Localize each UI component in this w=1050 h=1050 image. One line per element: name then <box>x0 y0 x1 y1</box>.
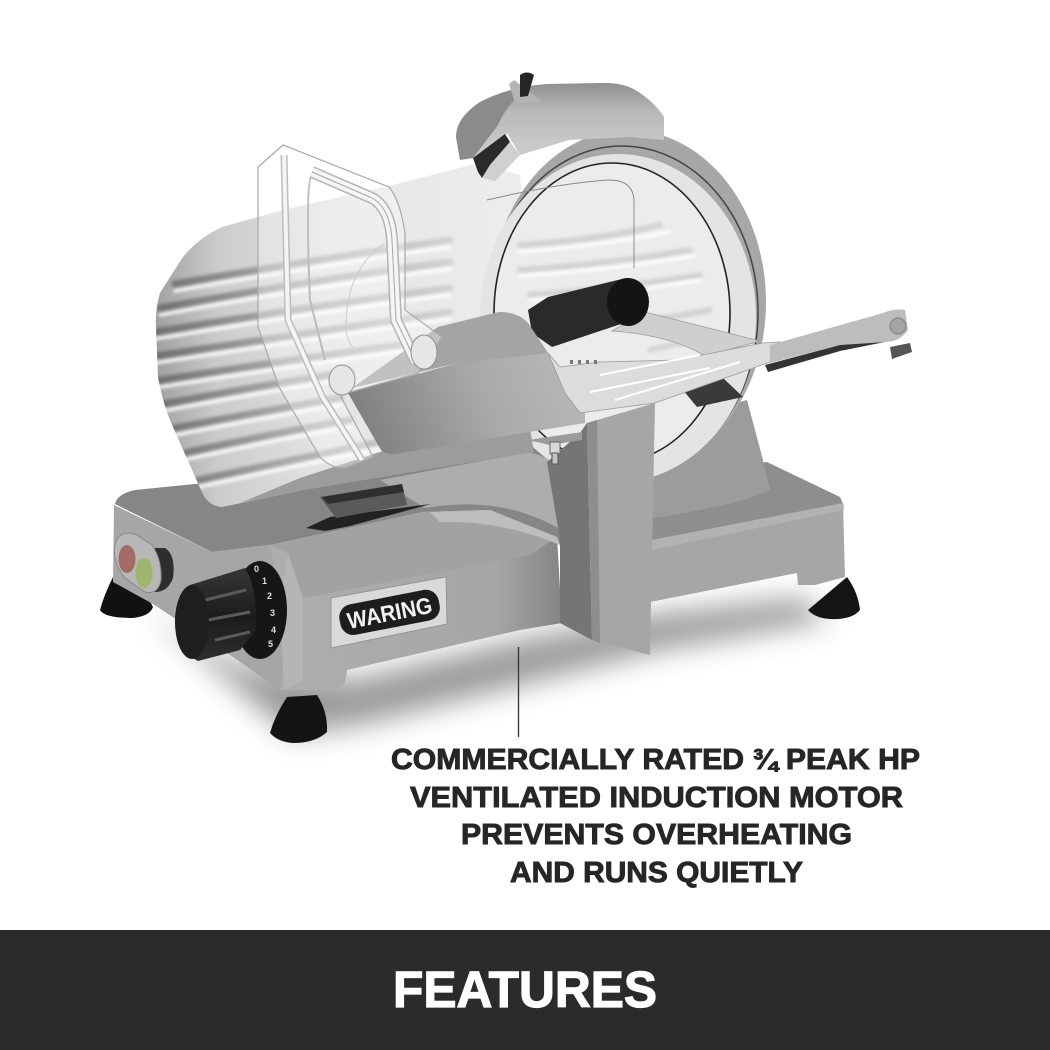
feature description: COMMERCIALLY RATED ¾ PEAK HP <box>391 744 920 776</box>
handle end cap <box>607 278 649 326</box>
dial knob <box>175 568 256 661</box>
heading: features: FEATURES <box>393 961 657 1018</box>
inner blade ribs <box>520 225 715 350</box>
guard hinge: lower <box>329 365 355 395</box>
plate lower shade <box>240 428 534 503</box>
tray upper face <box>352 312 548 388</box>
mounting bolts <box>528 432 582 464</box>
cover left shade <box>456 88 525 160</box>
top blade cover <box>456 72 664 181</box>
feature description: PREVENTS OVERHEATING <box>461 819 852 851</box>
knob face <box>175 585 209 659</box>
black handle <box>528 278 649 347</box>
arc seen through guard <box>346 243 385 348</box>
housing upper bevel <box>270 510 557 598</box>
dial numbers: 4 <box>271 625 276 635</box>
feature description: AND RUNS QUIETLY <box>510 857 803 889</box>
green button <box>136 558 152 588</box>
base: upper highlight behind plate <box>380 452 558 528</box>
black wedge under tray <box>683 378 743 407</box>
motor body behind blade <box>620 400 770 518</box>
foot: front <box>270 695 327 743</box>
dial numbers: 5 <box>268 639 273 649</box>
guard inner line <box>308 175 325 360</box>
outer blade rim <box>490 130 766 474</box>
leader line <box>518 647 520 737</box>
dark cover gap <box>473 134 510 178</box>
silver carriage bracket <box>482 142 520 181</box>
arm screw <box>890 343 912 359</box>
red button <box>118 545 136 573</box>
foot: rear right <box>808 577 860 619</box>
dial numbers: 1 <box>262 576 267 586</box>
product tray <box>348 312 585 454</box>
brand nameplate <box>331 577 447 648</box>
dial numbers: 0 <box>254 564 259 574</box>
base: right section <box>640 462 845 602</box>
plate serrations <box>590 355 740 400</box>
guard top rail <box>312 172 416 362</box>
thickness dial <box>175 561 287 661</box>
arm pivot <box>890 318 906 334</box>
feature description <box>391 744 920 889</box>
switch back <box>150 548 174 592</box>
guard left rail <box>284 155 362 460</box>
clear food guard <box>258 145 442 468</box>
column front <box>587 403 655 655</box>
dial numbers: 2 <box>267 591 272 601</box>
plate ribs <box>155 240 450 489</box>
dial scale ring <box>233 561 287 659</box>
tray top plate and pusher arm <box>548 309 912 413</box>
nameplate logo: WARING <box>345 592 434 634</box>
switch clear cover <box>114 533 161 592</box>
housing corner highlight <box>280 553 303 690</box>
base: top plane left <box>115 440 560 552</box>
white blade ring <box>480 154 756 482</box>
carriage clamp <box>306 484 431 531</box>
dial numbers <box>254 564 276 649</box>
column dark side <box>547 423 592 640</box>
blade centre panel outline <box>487 180 634 268</box>
motor housing front <box>270 510 562 690</box>
dial numbers: 3 <box>270 608 275 618</box>
on/off switch <box>114 533 174 592</box>
inner blade disc <box>494 163 730 463</box>
pusher arm <box>770 309 908 363</box>
right base front face <box>650 503 845 602</box>
base: left side face <box>113 505 292 690</box>
cover shell <box>456 83 664 160</box>
curved support rod <box>612 312 760 356</box>
ribbed carriage plate <box>155 163 530 507</box>
guard hinge: upper <box>411 335 437 369</box>
drop shadow under slicer <box>150 598 830 735</box>
column support <box>547 403 655 655</box>
footer band <box>0 930 1050 1050</box>
cover knob <box>509 80 542 103</box>
feature description: VENTILATED INDUCTION MOTOR <box>410 782 903 814</box>
right base top plane <box>640 462 844 542</box>
blade assembly <box>480 130 766 482</box>
foot: rear left <box>100 577 153 618</box>
